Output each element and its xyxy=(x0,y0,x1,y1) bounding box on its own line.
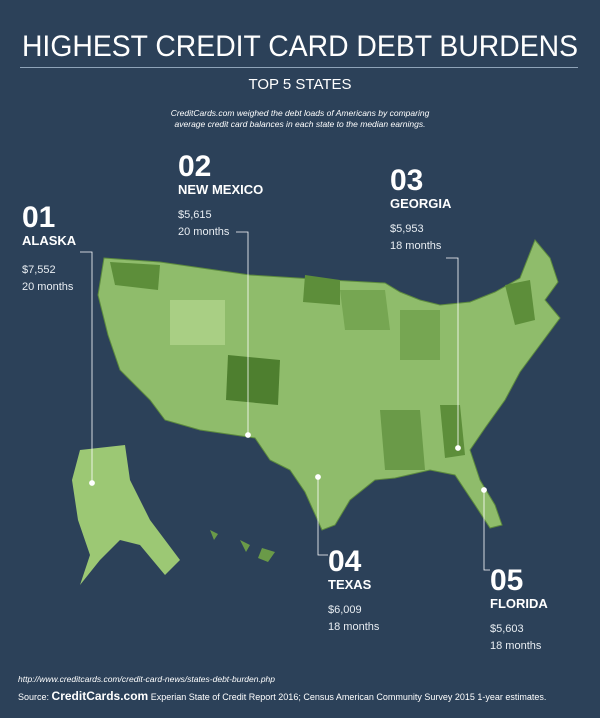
callout: New Mexico: $5,615 xyxy=(178,209,212,221)
footer url: http://www.creditcards.com/credit-card-news/states-debt-burden.php xyxy=(18,674,275,684)
callout: Texas: 18 months xyxy=(328,621,379,633)
callout: Alaska xyxy=(22,201,76,293)
callout: Florida: $5,603 xyxy=(490,623,524,635)
intro text xyxy=(171,108,430,129)
callout: Georgia: $5,953 xyxy=(390,223,424,235)
callout: Georgia: 18 months xyxy=(390,240,441,252)
intro text: average credit card balances in each state to the median earnings. xyxy=(175,119,425,129)
callout: Georgia: GEORGIA xyxy=(390,196,451,211)
callout: Alaska: 01 xyxy=(22,201,55,234)
callout: Texas: 04 xyxy=(328,545,361,578)
title: HIGHEST CREDIT CARD DEBT BURDENS xyxy=(22,30,578,63)
callout: Texas: $6,009 xyxy=(328,604,362,616)
callout: Florida: FLORIDA xyxy=(490,596,548,611)
leader lines xyxy=(80,232,490,570)
alaska xyxy=(72,445,180,585)
callout: Florida: 05 xyxy=(490,564,523,597)
callout: Alaska: $7,552 xyxy=(22,264,56,276)
intro text: CreditCards.com weighed the debt loads of Americans by comparing xyxy=(171,108,429,118)
source: Source: CreditCards.com Experian State of Credit Report 2016; Census American Community Survey 2015 1-year estimates. xyxy=(18,689,546,703)
callout: Florida: 18 months xyxy=(490,640,541,652)
callout: New Mexico xyxy=(178,150,263,238)
darker states xyxy=(110,262,160,290)
hawaii xyxy=(210,530,275,562)
callout: Florida xyxy=(490,564,548,652)
callout: Texas xyxy=(328,545,379,633)
callout: Georgia: 03 xyxy=(390,164,423,197)
callout: New Mexico: NEW MEXICO xyxy=(178,182,263,197)
callout: Alaska: 20 months xyxy=(22,281,73,293)
callout: Texas: TEXAS xyxy=(328,577,371,592)
callout: New Mexico: 02 xyxy=(178,150,211,183)
subtitle: TOP 5 STATES xyxy=(248,76,352,93)
callout: New Mexico: 20 months xyxy=(178,226,229,238)
callout: Georgia xyxy=(390,164,451,252)
lower 48 xyxy=(98,240,560,530)
callout: Alaska: ALASKA xyxy=(22,233,76,248)
